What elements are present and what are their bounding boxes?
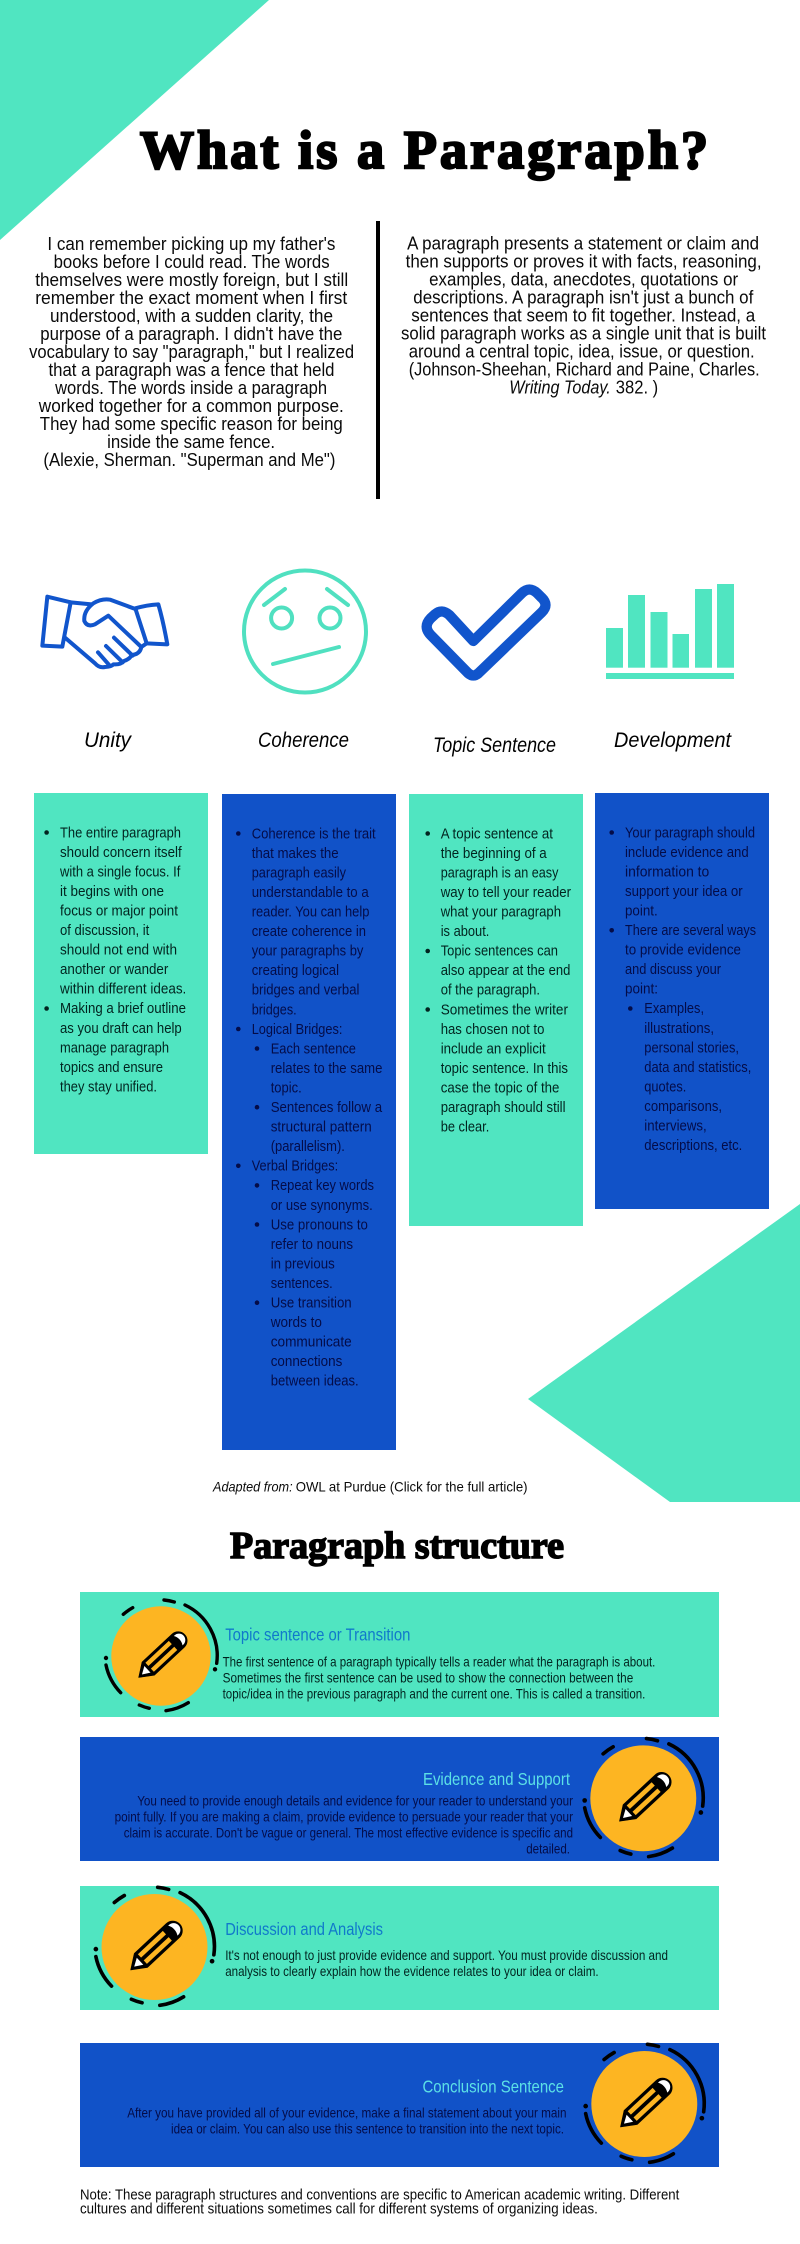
panel: coherence: paragraph easily [252, 864, 346, 881]
body text [127, 2104, 566, 2136]
text block: Alexie quote: They had some specific reason for being [40, 413, 343, 434]
panel: coherence: Use pronouns to [271, 1216, 368, 1233]
panel: development: data and statistics, [644, 1059, 751, 1076]
text block: paragraph definition: examples, data, anecdotes, quotations or [429, 268, 738, 289]
label: Development: Development [614, 729, 732, 752]
panel: topic sentence: also appear at the end [441, 962, 570, 979]
panel: development: to provide evidence [625, 942, 741, 959]
panel: topic sentence or transition [80, 1592, 719, 1717]
text block: Alexie quote: worked together for a common purpose. [38, 395, 344, 416]
panel: development: quotes. [644, 1078, 686, 1095]
panel: topic sentence: A topic sentence at [441, 825, 554, 842]
icon: pencil badge [104, 1600, 217, 1711]
body text: topic/idea in the previous paragraph and the current one. This is called a transition. [223, 1686, 645, 1702]
panel: development: Examples, [644, 1000, 704, 1017]
panel: topic sentence: case the topic of the [441, 1080, 559, 1096]
note: cultures and different situations sometimes call for different systems of organizing ideas. [80, 2200, 598, 2217]
panel: unity: they stay unified. [60, 1078, 157, 1095]
heading: Evidence and Support [423, 1769, 570, 1789]
panel: topic sentence: topic sentence. In this [441, 1060, 568, 1077]
right teal arrow shape [528, 1204, 800, 1502]
panel: development: point: [625, 981, 658, 998]
panel: topic sentence: be clear. [441, 1119, 489, 1136]
panel: development: information to [625, 863, 709, 880]
text block: Alexie quote: understood, with a sudden clarity, the [50, 305, 333, 326]
panel: coherence: relates to the same [271, 1060, 382, 1077]
text block: Alexie quote: themselves were mostly foreign, but I still [35, 269, 348, 290]
text block: Alexie quote [29, 233, 354, 470]
icon: pencil badge [582, 1739, 703, 1857]
panel: coherence: Sentences follow a [271, 1099, 383, 1116]
text block: Alexie quote: that a paragraph was a fence that held [48, 359, 334, 380]
panel: topic sentence: paragraph should still [441, 1099, 566, 1116]
panel: coherence: words to [270, 1314, 322, 1331]
text block: Alexie quote: I can remember picking up my father's [47, 233, 335, 254]
icon: pencil badge [94, 1887, 214, 2005]
panel: coherence: that makes the [252, 845, 339, 862]
panel: development: point. [625, 902, 658, 920]
panel: topic sentence: is about. [441, 923, 489, 940]
text block: Alexie quote: purpose of a paragraph. I didn't have the [40, 323, 342, 344]
panel: coherence: Each sentence [271, 1040, 356, 1057]
panel: coherence: (parallelism). [271, 1138, 345, 1155]
panel: coherence: connections [271, 1353, 342, 1370]
panel: unity: another or wander [60, 961, 168, 978]
panel: unity: it begins with one [60, 883, 164, 900]
panel: unity: should concern itself [60, 844, 182, 861]
body text [223, 1654, 655, 1702]
body text: It's not enough to just provide evidence and support. You must provide discussion and [225, 1947, 668, 1963]
panel: development: include evidence and [625, 844, 749, 861]
panel: coherence: bridges and verbal [252, 982, 359, 999]
panel: unity: should not end with [60, 942, 177, 959]
panel: topic sentence: has chosen not to [441, 1021, 544, 1038]
panel: development: descriptions, etc. [644, 1137, 742, 1154]
panel: development: and discuss your [625, 961, 721, 978]
panel: unity: of discussion, it [60, 922, 150, 939]
text block: paragraph definition: A paragraph presents a statement or claim and [407, 232, 759, 253]
panel: conclusion sentence [80, 2043, 719, 2167]
panel: unity: as you draft can help [60, 1020, 182, 1037]
panel: unity: Making a brief outline [60, 1000, 186, 1017]
panel: development [595, 793, 769, 1209]
panel: development: illustrations, [644, 1020, 714, 1037]
panel: topic sentence: Topic sentences can [441, 943, 558, 960]
panel: coherence: reader. You can help [252, 904, 369, 920]
panel: coherence: your paragraphs by [252, 943, 364, 960]
body text: detailed. [526, 1841, 570, 1857]
body text [115, 1793, 573, 1857]
panel: development: support your idea or [625, 883, 743, 900]
panel: coherence: Logical Bridges: [252, 1021, 342, 1038]
panel: topic sentence: include an explicit [441, 1040, 546, 1057]
panel: unity: topics and ensure [60, 1059, 163, 1076]
panel: discussion and analysis [80, 1886, 719, 2010]
panel: coherence: understandable to a [252, 884, 369, 901]
body text: analysis to clearly explain how the evidence relates to your idea or claim. [225, 1963, 599, 1979]
text block: Alexie quote: inside the same fence. [107, 431, 275, 452]
panel: coherence: Repeat key words [271, 1177, 374, 1194]
title: What is a Paragraph? [140, 120, 708, 180]
panel: coherence: refer to nouns [271, 1236, 353, 1253]
body text: Sometimes the first sentence can be used to show the connection between the [223, 1670, 633, 1686]
icon: bar chart [606, 584, 734, 679]
body text: The first sentence of a paragraph typically tells a reader what the paragraph is about. [223, 1654, 655, 1670]
note [80, 2186, 680, 2217]
text block: paragraph definition: 382. ) [616, 376, 658, 397]
panel: topic sentence: of the paragraph. [441, 982, 540, 999]
heading: Discussion and Analysis [225, 1919, 383, 1939]
text block: paragraph definition: (Johnson-Sheehan, Richard and Paine, Charles. [409, 358, 760, 379]
text block: paragraph definition: Writing Today. [509, 376, 611, 397]
panel: topic sentence [409, 794, 583, 1226]
panel: coherence: in previous [271, 1255, 335, 1272]
panel: coherence [222, 794, 396, 1450]
panel: evidence and support [80, 1737, 719, 1861]
panel: unity: The entire paragraph [60, 824, 181, 841]
text block: Alexie quote: words. The words inside a paragraph [54, 377, 327, 398]
text block: paragraph definition: descriptions. A paragraph isn't just a bunch of [413, 286, 754, 307]
text block: paragraph definition [401, 232, 766, 397]
panel: topic sentence: the beginning of a [441, 845, 547, 862]
attribution: Adapted from: [212, 1479, 293, 1495]
panel: unity: manage paragraph [60, 1039, 169, 1056]
text block: Alexie quote: (Alexie, Sherman. "Superman and Me") [43, 449, 335, 470]
panel: unity: focus or major point [60, 902, 179, 920]
body text [225, 1947, 668, 1979]
panel: unity: with a single focus. If [59, 863, 181, 880]
top-left teal triangle [0, 0, 269, 240]
icon: confused face [244, 570, 366, 692]
vertical divider [376, 221, 380, 499]
icon: handshake [42, 597, 167, 667]
panel: unity [34, 793, 208, 1154]
panel: coherence: structural pattern [271, 1119, 372, 1136]
heading: paragraph structure: Paragraph structure [230, 1525, 564, 1567]
panel: coherence: or use synonyms. [271, 1197, 373, 1214]
panel: coherence: Coherence is the trait [252, 825, 376, 842]
note: Note: These paragraph structures and conventions are specific to American academic writing. Different [80, 2186, 680, 2203]
text block: Alexie quote: remember the exact moment when I first [35, 287, 347, 308]
panel: coherence: create coherence in [252, 923, 366, 940]
body text: idea or claim. You can also use this sentence to transition into the next topic. [171, 2120, 564, 2136]
panel: coherence: Verbal Bridges: [252, 1158, 338, 1175]
icon: check mark [427, 589, 545, 675]
panel: topic sentence: what your paragraph [440, 904, 561, 920]
panel: topic sentence: paragraph is an easy [441, 864, 559, 881]
panel: topic sentence: way to tell your reader [440, 884, 571, 901]
text block: paragraph definition: around a central topic, idea, issue, or question. [409, 340, 755, 361]
body text: point fully. If you are making a claim, provide evidence to persuade your reader that your [115, 1809, 573, 1825]
panel: development: Your paragraph should [625, 824, 755, 841]
text block: paragraph definition: solid paragraph works as a single unit that is built [401, 322, 766, 343]
panel: coherence: creating logical [252, 962, 339, 979]
panel: coherence: bridges. [252, 1001, 297, 1018]
panel: development: comparisons, [644, 1098, 722, 1115]
panel: coherence: topic. [271, 1080, 302, 1096]
panel: coherence: Use transition [271, 1294, 352, 1312]
body text: After you have provided all of your evidence, make a final statement about your main [127, 2104, 566, 2120]
text block: Alexie quote: vocabulary to say "paragraph," but I realized [29, 341, 354, 362]
panel: topic sentence: Sometimes the writer [441, 1001, 568, 1018]
icon: pencil badge [583, 2044, 704, 2162]
attribution: OWL at Purdue (Click for the full article) [296, 1479, 528, 1495]
panel: development: There are several ways [625, 922, 756, 939]
heading: Topic sentence or Transition [225, 1625, 410, 1645]
text block: Alexie quote: books before I could read. The words [54, 251, 330, 272]
panel: development: personal stories, [644, 1039, 739, 1056]
panel: unity: within different ideas. [59, 981, 186, 998]
text block: paragraph definition: sentences that seem to fit together. Instead, a [411, 304, 756, 325]
label: Topic Sentence: Topic Sentence [433, 734, 556, 757]
panel: coherence: between ideas. [271, 1373, 359, 1390]
panel: coherence: communicate [271, 1334, 352, 1351]
heading: Conclusion Sentence [422, 2076, 564, 2096]
panel: development: interviews, [644, 1118, 707, 1134]
body text: claim is accurate. Don't be vague or general. The most effective evidence is specific and [124, 1825, 573, 1841]
panel: coherence: sentences. [271, 1275, 333, 1292]
body text: You need to provide enough details and evidence for your reader to understand your [137, 1793, 573, 1809]
label: Unity: Unity [84, 729, 132, 752]
label: Coherence: Coherence [258, 729, 349, 752]
text block: paragraph definition: then supports or proves it with facts, reasoning, [406, 250, 762, 271]
